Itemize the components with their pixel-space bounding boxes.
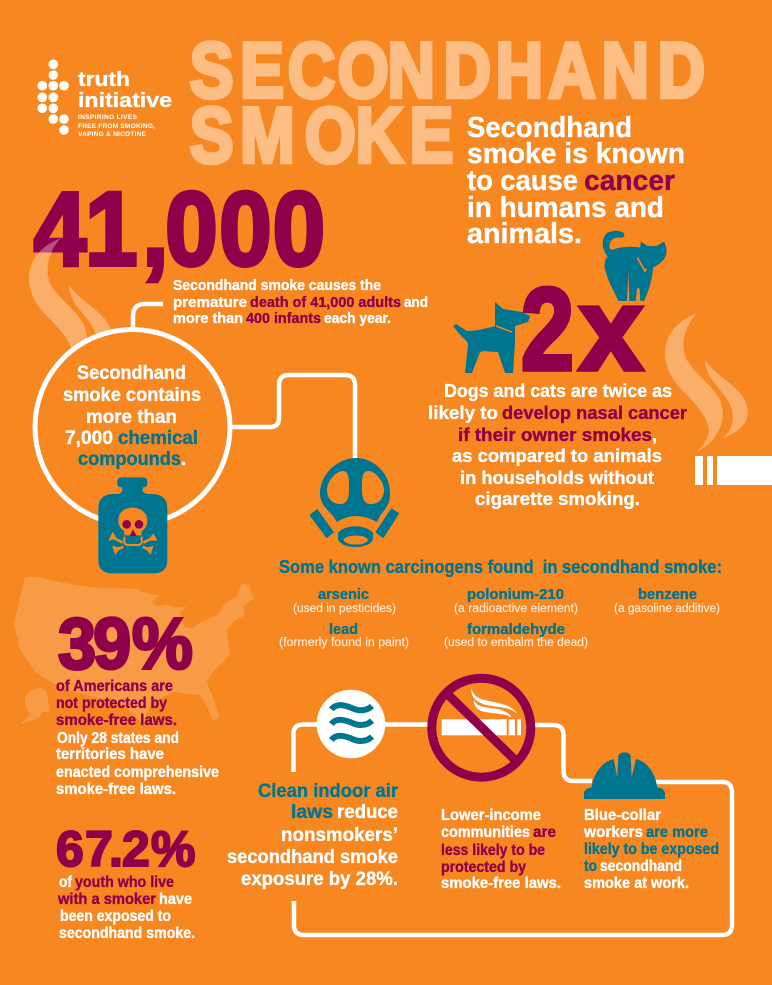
text: lower-income communities: protected by [441, 859, 526, 876]
text: dogs and cats: Dogs and cats are twice as [444, 380, 672, 401]
text: premature deaths: death of 41,000 adults [250, 295, 401, 311]
benzene: (a gasoline additive) [614, 603, 720, 615]
heading: known to cause cancer: Secondhand [467, 112, 632, 144]
text: premature deaths: each year. [324, 311, 391, 327]
lead: (formerly found in paint) [279, 637, 409, 649]
text: youth exposure: have [159, 891, 192, 908]
title [190, 28, 705, 179]
circle text: 7,000 [65, 428, 113, 449]
text: smoke-free laws: not protected by [56, 695, 167, 712]
arsenic [293, 586, 396, 615]
polonium-210 [454, 586, 578, 615]
text: clean indoor air: reduce [337, 802, 398, 823]
circle text: smoke contains [63, 385, 201, 406]
polonium-210: polonium-210 [467, 586, 564, 603]
text: blue-collar workers [583, 807, 719, 892]
text: smoke-free laws: of Americans are [56, 678, 173, 695]
benzene: benzene [638, 586, 697, 603]
text: dogs and cats: as compared to animals [452, 445, 662, 466]
polonium-210: (a radioactive element) [454, 603, 578, 615]
text: clean indoor air [227, 781, 399, 890]
logo dots [38, 60, 69, 135]
icon: dog [453, 302, 530, 373]
text: premature deaths: 400 infants [246, 311, 321, 327]
title: SECONDHAND [190, 28, 705, 114]
statistic: 2x [521, 264, 643, 394]
panel: chemical compounds circle [35, 330, 230, 524]
text: premature deaths: premature [173, 295, 247, 311]
icon: left smoke wisps [29, 238, 112, 378]
logo wordmark: VAPING & NICOTINE [78, 131, 147, 138]
text: premature deaths: more than [173, 311, 243, 327]
text: smoke-free laws: smoke-free laws. [56, 712, 177, 729]
logo wordmark: INSPIRING LIVES [78, 114, 138, 121]
logo wordmark: FREE FROM SMOKING, [78, 123, 155, 130]
circle outline [35, 330, 230, 524]
circle text: more than [86, 407, 177, 428]
text: youth exposure: with a smoker [57, 891, 156, 908]
skull [108, 508, 158, 555]
icon: cigarette [695, 456, 772, 485]
statistic: 2x: x [579, 264, 643, 394]
statistic: 41,000: 41,000 [34, 171, 325, 288]
formaldehyde [444, 621, 588, 649]
text: dogs and cats: likely to [428, 402, 498, 423]
arsenic: arsenic [318, 586, 369, 603]
text: lower-income communities: communities [441, 824, 530, 841]
text: blue-collar workers: smoke at work. [584, 875, 689, 892]
logo wordmark: truth [78, 69, 130, 91]
benzene [614, 586, 720, 615]
text: smoke-free laws [56, 678, 219, 798]
text: blue-collar workers: are more [646, 824, 708, 841]
text: lower-income communities: are [533, 824, 556, 841]
icon: clean air [317, 690, 385, 758]
icon: right smoke wisps [665, 313, 748, 453]
text: dogs and cats: develop nasal cancer [502, 402, 687, 423]
text: lower-income communities: less likely to be [441, 842, 545, 859]
text: clean indoor air: Clean indoor air [258, 781, 399, 802]
carcinogens heading: Some known carcinogens found in secondhand smoke: [279, 557, 722, 577]
text: lower-income communities [441, 807, 561, 892]
heading: known to cause cancer: to cause [467, 165, 578, 197]
text: blue-collar workers: to [584, 858, 597, 875]
text: youth exposure: of [59, 874, 73, 891]
text: dogs and cats: cigarette smoking. [475, 488, 640, 509]
text: blue-collar workers: workers [583, 824, 643, 841]
text: premature deaths: and [404, 295, 428, 311]
circle text: . [181, 449, 186, 470]
formaldehyde: formaldehyde [467, 621, 565, 638]
arsenic: (used in pesticides) [293, 603, 396, 615]
logo wordmark: initiative [78, 90, 172, 112]
text: clean indoor air: exposure by 28%. [241, 869, 398, 890]
heading: known to cause cancer [467, 112, 685, 250]
icon: poison bottle [98, 477, 167, 573]
text: blue-collar workers: likely to be exposed [584, 841, 719, 858]
text: clean indoor air: secondhand smoke [227, 847, 398, 868]
text: clean indoor air: nonsmokers’ [281, 825, 398, 846]
logo wordmark [78, 69, 172, 138]
circle text [63, 363, 201, 470]
panel: carcinogens [279, 557, 722, 649]
title: SMOKE [190, 93, 453, 179]
formaldehyde: (used to embalm the dead) [444, 637, 588, 649]
icon: gas mask [309, 458, 399, 547]
text: youth exposure [57, 874, 195, 942]
icon: no smoking [432, 678, 531, 777]
heading: known to cause cancer: smoke is known [467, 138, 685, 170]
text: lower-income communities: Lower-income [441, 807, 541, 824]
icon: cat [603, 231, 667, 301]
text: youth exposure: been exposed to [60, 908, 171, 925]
logo: truth initiative [38, 60, 172, 138]
connector: deaths text to circle [133, 304, 163, 330]
text: clean indoor air: laws [291, 802, 333, 823]
statistic: 39%: 39% [58, 603, 193, 684]
statistic: 2x: 2 [521, 264, 574, 394]
lead [279, 621, 409, 649]
text: dogs and cats: if their owner smokes [458, 424, 652, 445]
heading: known to cause cancer: animals. [467, 218, 582, 250]
connector: bottom loop [294, 724, 732, 935]
text: smoke-free laws: territories have [56, 746, 164, 763]
icon: hard hat [584, 752, 665, 799]
text: smoke-free laws: enacted comprehensive [56, 764, 219, 781]
text: dogs and cats [428, 380, 687, 509]
statistic: 67.2%: 67.2% [56, 821, 195, 877]
text: smoke-free laws: smoke-free laws. [56, 781, 176, 798]
connector: circle to gas mask [230, 375, 355, 460]
heading: known to cause cancer: cancer [584, 165, 675, 197]
text: lower-income communities: smoke-free laws. [441, 875, 561, 892]
text: premature deaths [173, 278, 428, 327]
text: smoke-free laws: Only 28 states and [57, 730, 179, 747]
text: blue-collar workers: Blue-collar [584, 807, 661, 824]
circle text: chemical [118, 428, 198, 449]
text: dogs and cats: , [652, 424, 657, 445]
circle text: Secondhand [77, 363, 186, 384]
text: premature deaths: Secondhand smoke causes the [173, 278, 381, 294]
text: blue-collar workers: secondhand [600, 858, 682, 875]
text: youth exposure: youth who live [75, 874, 174, 891]
text: youth exposure: secondhand smoke. [59, 925, 195, 942]
lead: lead [329, 621, 358, 638]
heading: known to cause cancer: in humans and [467, 192, 664, 224]
circle text: compounds [78, 449, 181, 470]
text: dogs and cats: in households without [460, 467, 654, 488]
map: United States [14, 577, 254, 725]
dog collar [496, 326, 512, 332]
